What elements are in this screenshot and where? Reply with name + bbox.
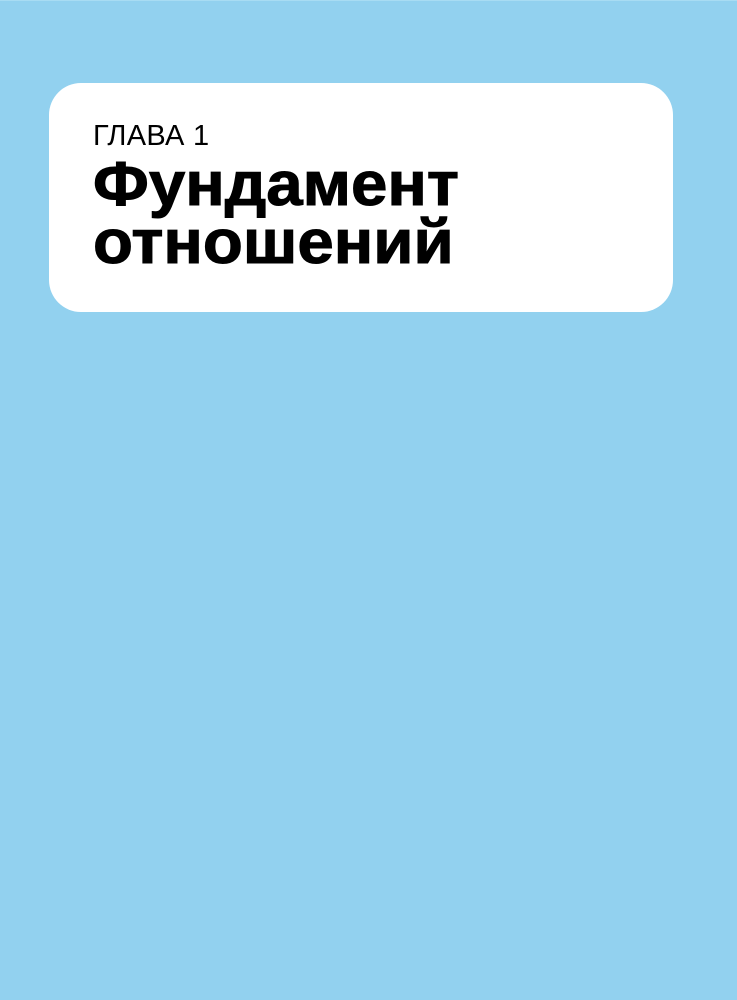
- title: [93, 150, 459, 277]
- panel: chapter heading: [49, 83, 673, 312]
- title: отношений: [93, 208, 454, 277]
- chapter label: ГЛАВА 1: [93, 120, 209, 152]
- title: Фундамент: [93, 150, 459, 219]
